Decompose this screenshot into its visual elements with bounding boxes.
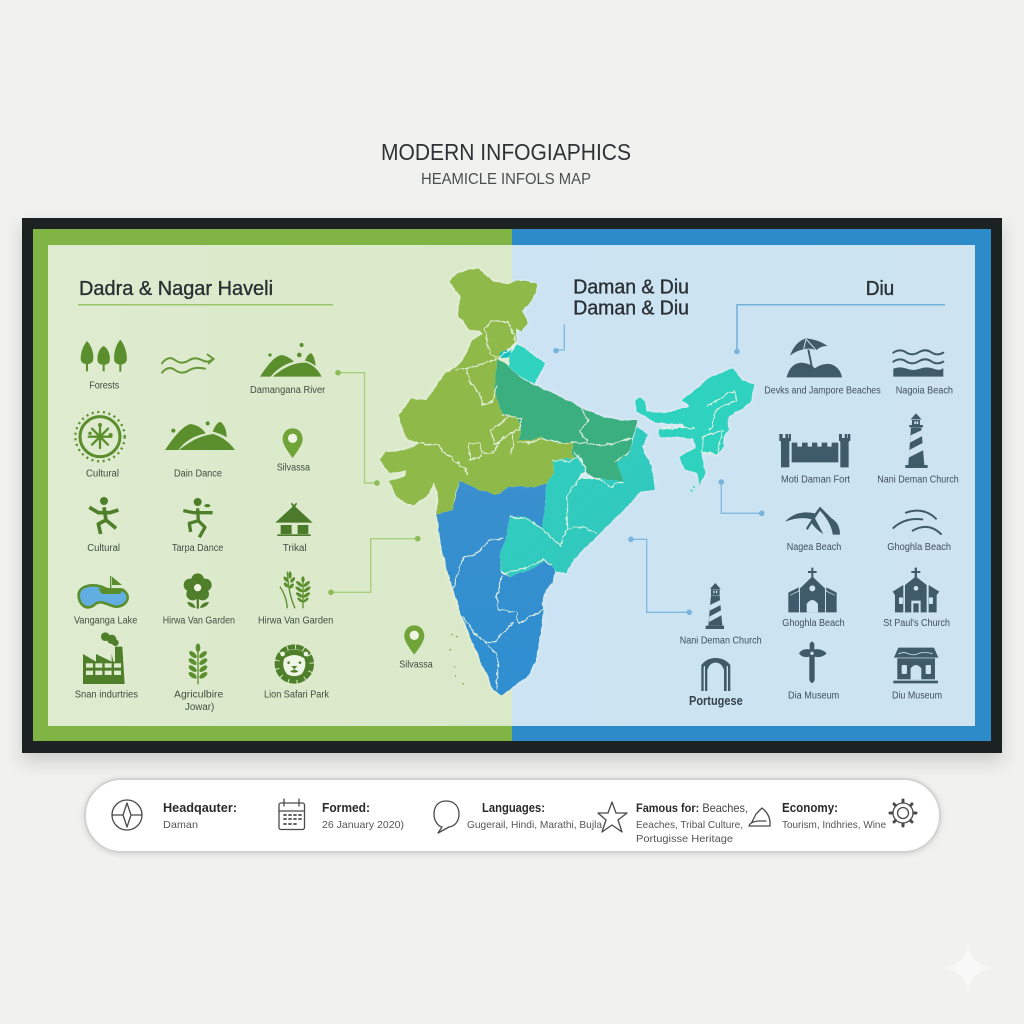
info: languages [434, 801, 602, 833]
icon: star [598, 802, 627, 832]
label: Cultural: Cultural [87, 543, 120, 554]
icon: leafy plants [280, 571, 311, 608]
icon: location pin [404, 625, 424, 655]
label: Ghoghla Beach: Ghoghla Beach [887, 542, 951, 553]
icon: location pin [283, 428, 303, 458]
label: Nani Deman Church: Nani Deman Church [877, 475, 959, 486]
label: Nagea Beach: Nagea Beach [787, 542, 841, 553]
label: Hirwa Van Garden: Hirwa Van Garden [258, 615, 333, 626]
item: Nagoa Beach [893, 350, 953, 396]
label: Cultural: Cultural [86, 469, 119, 480]
item: Cultural dancer [87, 497, 120, 554]
heading: Diu: Diu [866, 278, 894, 300]
item: Tarpa Dance [172, 498, 224, 554]
panel: Daman and Diu [512, 229, 991, 741]
item: Diu Museum [892, 648, 942, 701]
region: north-east states [635, 368, 755, 485]
icon: speech bubble [434, 801, 459, 833]
item: Agriculture [174, 643, 224, 713]
item: Nani Daman Church lighthouse small [680, 583, 762, 646]
icon: lake with boat [79, 576, 128, 607]
label: St Paul's Church: St Paul's Church [883, 618, 950, 629]
dark display frame [22, 218, 1002, 753]
region: northern and western green states [380, 268, 578, 515]
item: Lion Safari Park [264, 647, 330, 701]
info: famous for: Portugisse Heritage [636, 833, 733, 845]
info: famous for: Eeaches, Tribal Culture, [636, 819, 743, 831]
icon: beach umbrella [787, 338, 842, 377]
info: formed [279, 799, 404, 831]
item: Tribal hut [275, 503, 313, 554]
label: Damangana River: Damangana River [250, 385, 326, 396]
icon: museum building [893, 648, 938, 683]
info: formed: 26 January 2020) [322, 819, 404, 831]
text: famous for: Famous for: Beaches, [636, 801, 748, 815]
item: Ghoghla Beach arcs [887, 511, 951, 553]
text: economy: Economy: [782, 801, 838, 815]
icon: calendar [279, 799, 304, 830]
label: Silvassa: Silvassa [277, 463, 310, 474]
icon: ornate cross [799, 642, 827, 683]
state borders [420, 321, 737, 690]
item: St Paul's Church [883, 568, 950, 629]
decorative star [943, 943, 993, 993]
text: formed: Formed: [322, 801, 370, 815]
map of India [380, 268, 755, 695]
text: headquarter: Headqauter: [163, 801, 237, 815]
info: headquarter: Daman [163, 819, 198, 831]
icon: gear [890, 800, 916, 826]
label: Devks and Jampore Beaches: Devks and Jampore Beaches [764, 385, 881, 396]
icon: lighthouse [706, 583, 724, 629]
icon: wheat [187, 643, 208, 684]
icon: hills [260, 343, 322, 377]
icon: church [788, 568, 837, 612]
subtitle: HEAMICLE INFOLS MAP [421, 171, 591, 188]
icon: beach scene [749, 808, 770, 826]
label: Agriculture Jowar: Agriculbire [174, 690, 224, 701]
connector lines: green side [328, 370, 421, 595]
info: famous for [598, 801, 770, 845]
label: Tarpa Dance: Tarpa Dance [172, 543, 224, 554]
icon: flower [184, 573, 212, 609]
icon: hills [165, 421, 235, 450]
label: Dain Dance: Dain Dance [174, 469, 222, 480]
label: Silvassa: Silvassa [399, 660, 433, 671]
icon: dancer with tarpa [183, 498, 213, 537]
label: Vanganga Lake: Vanganga Lake [74, 615, 138, 626]
icon: church with windows [893, 568, 939, 612]
islands [450, 634, 463, 684]
heading: Daman and Diu [573, 276, 689, 319]
item: Dain Dance [165, 421, 235, 480]
icon: lion [277, 647, 312, 681]
connector lines: blue side [553, 305, 945, 615]
info: headquarter [112, 800, 237, 831]
item: Hirwa Van Garden plants [258, 571, 333, 626]
label: Ghoghla Beach: Ghoghla Beach [782, 618, 845, 629]
icon: compass [112, 800, 142, 830]
region: eastern teal states [500, 427, 655, 577]
label: Hirwa Van Garden: Hirwa Van Garden [163, 615, 235, 626]
icon: waves [893, 350, 943, 377]
icon: river waves with arrow [162, 355, 214, 373]
item: Small industries [75, 632, 138, 701]
icon: dancer [89, 497, 118, 534]
item: Silvassa map marker [399, 625, 433, 671]
item: Cultural mandala [75, 412, 125, 480]
label: Snan indurtries: Snan indurtries [75, 690, 138, 701]
label: Dia Museum: Dia Museum [788, 690, 839, 701]
title: MODERN INFOGIAPHICS [381, 139, 631, 165]
item: Hirwa Van Garden flower [163, 573, 235, 626]
item: Agriculture: Jowar) [185, 702, 214, 713]
item: Devka and Jampore Beaches [764, 338, 881, 396]
heading: Dadra and Nagar Haveli: Dadra & Nagar Haveli [79, 278, 273, 300]
item: Ghoghla Beach church [782, 568, 845, 629]
heading: Daman and Diu: Daman & Diu [573, 297, 689, 319]
item: Nani Daman Church lighthouse [877, 413, 959, 486]
item: Damangana River [250, 343, 326, 396]
text: languages: Languages: [482, 801, 545, 815]
label: Trikal: Trikal [283, 543, 307, 554]
info: languages: Gugerail, Hindi, Marathi, Bujla [467, 819, 602, 831]
region: southern blue states [437, 482, 555, 695]
icon: dune arcs [893, 511, 941, 534]
icon: factory [83, 632, 125, 684]
region: Uttarakhand [508, 343, 545, 384]
heading: Daman and Diu: Daman & Diu [573, 276, 689, 298]
icon: fort [779, 434, 850, 467]
label: Lion Safari Park: Lion Safari Park [264, 690, 330, 701]
item: Forests [81, 340, 127, 392]
icon: lighthouse [905, 413, 928, 468]
label: Nani Deman Church: Nani Deman Church [680, 635, 762, 646]
item: Vanganga Lake [74, 576, 138, 626]
item: Nagea Beach [785, 507, 841, 553]
icon: cliff arch [785, 507, 840, 535]
item: Silvassa pin [277, 428, 310, 474]
title block [381, 139, 631, 188]
panel: Dadra and Nagar Haveli [33, 229, 512, 741]
icon: trees [81, 340, 127, 372]
item: Dia Museum [788, 642, 839, 701]
label: Forests: Forests [89, 381, 119, 392]
label: Moti Daman Fort: Moti Daman Fort [781, 475, 850, 486]
icon: mandala [75, 412, 125, 461]
icon: hut [275, 503, 313, 536]
info: economy: Tourism, Indhries, Wine [782, 819, 886, 831]
item: Portuguese arch [689, 658, 743, 708]
label: Portugese: Portugese [689, 694, 743, 708]
item: Moti Daman Fort [779, 434, 850, 486]
icon: arch [701, 658, 730, 691]
info: economy [782, 800, 916, 831]
label: Nagoia Beach: Nagoia Beach [896, 385, 953, 396]
info bar [85, 779, 940, 852]
region: central green-teal states [495, 358, 637, 482]
label: Diu Museum: Diu Museum [892, 690, 942, 701]
